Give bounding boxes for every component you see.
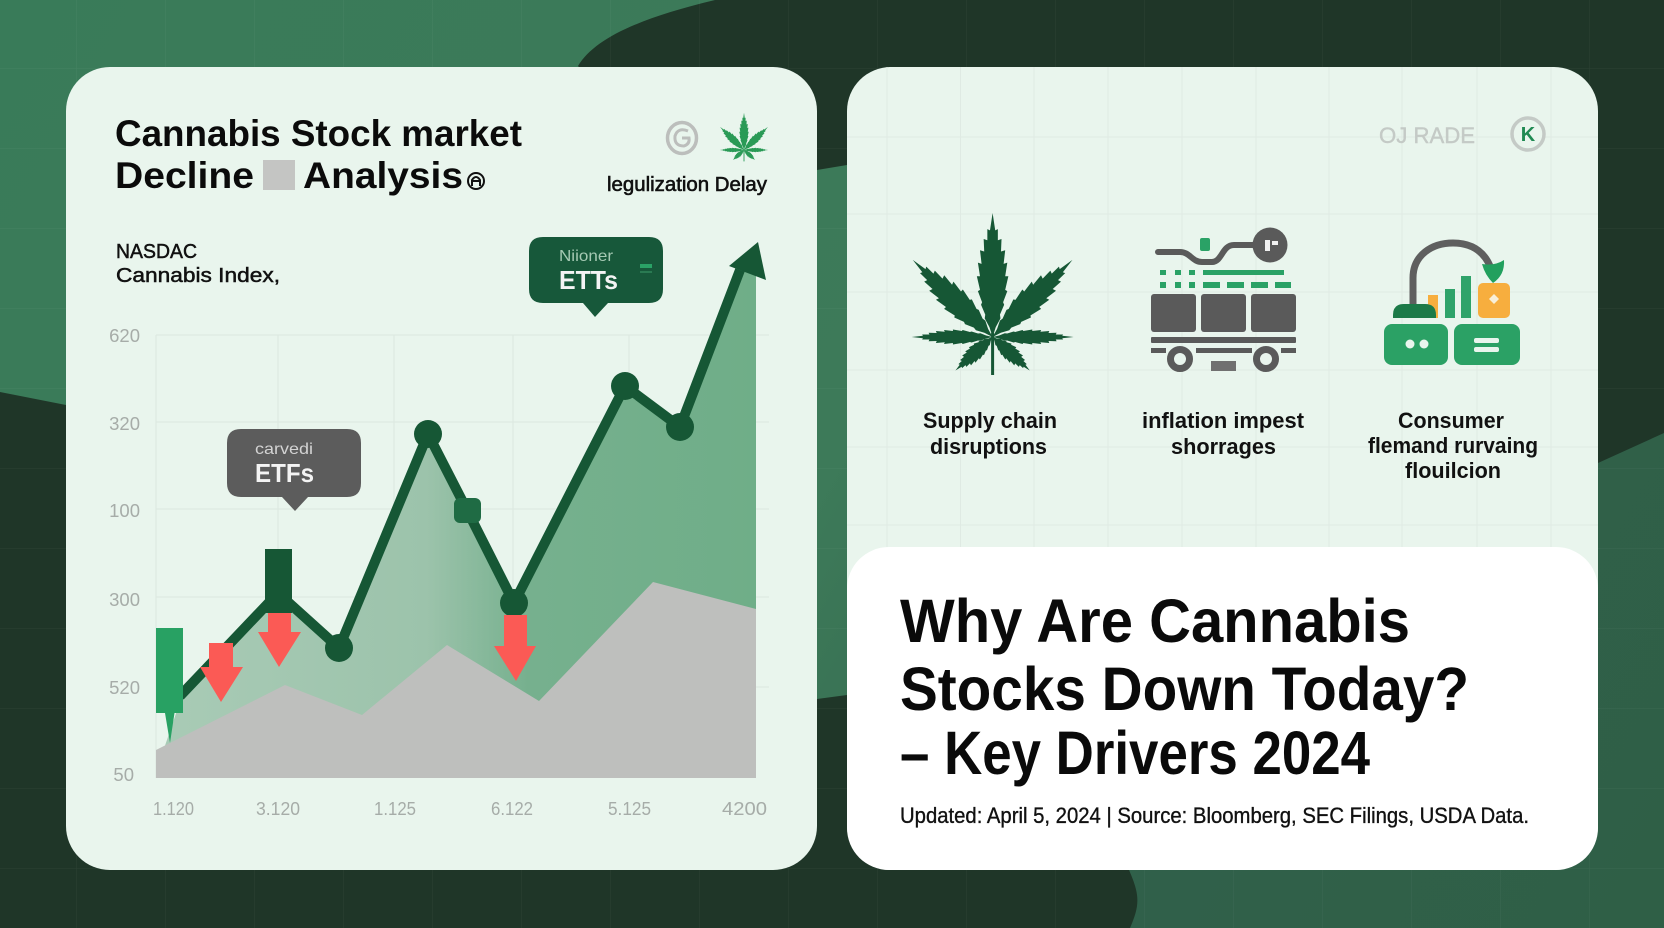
axis: x labels: 1.125 (374, 798, 416, 819)
markers (325, 372, 694, 662)
candle: dark green (265, 549, 292, 613)
heading: main title: – Key Drivers 2024 (900, 719, 1370, 787)
icon: grey circular badge (668, 122, 696, 154)
axis: y labels: 300 (109, 589, 140, 610)
label: consumer demand: Consumer (1398, 408, 1504, 433)
label: consumer demand (1368, 408, 1538, 483)
title: cannabis stock market decline analysis: Cannabis Stock market (115, 113, 522, 154)
label: inflation impest shorrages (1142, 408, 1305, 459)
arrow: red down 1 (200, 643, 243, 702)
callout: grey ETFs: ETFs (255, 458, 314, 488)
label: consumer demand: flemand rurvaing (1368, 433, 1538, 458)
title: cannabis stock market decline analysis: Analysis (303, 155, 463, 196)
callout: green ETTs (529, 237, 663, 317)
chart area: grey series (156, 582, 756, 778)
chart line with arrow (180, 242, 766, 696)
chart: cannabis index area and line chart (109, 242, 769, 819)
axis: y labels: 520 (109, 677, 140, 698)
axis: y labels: 620 (109, 325, 140, 346)
axis: x labels: 4200 (722, 798, 767, 819)
label: supply chain disruptions: Supply chain (923, 408, 1057, 433)
callout: grey ETFs (227, 429, 361, 511)
icon: K badge: K (1521, 124, 1536, 146)
callout: green ETTs: Niioner (559, 248, 614, 265)
icon: small green leaf (717, 113, 771, 162)
axis: y labels: 320 (109, 413, 140, 434)
axis: y labels: 100 (109, 500, 140, 521)
label: legalization delay: legulization Delay (607, 174, 767, 196)
panel: headline card (847, 547, 1598, 870)
callout: grey ETFs: carvedi (255, 441, 313, 458)
axis: x labels: 1.120 (153, 798, 194, 819)
arrow: red down 2 (258, 613, 301, 667)
axis: y labels (109, 325, 140, 785)
label: inflation impest shorrages: inflation impest (1142, 408, 1305, 433)
icon: delivery truck (1151, 228, 1296, 371)
title: cannabis stock market decline analysis (115, 113, 522, 196)
label: inflation impest shorrages: shorrages (1171, 434, 1276, 459)
title: cannabis stock market decline analysis: Decline (115, 155, 254, 196)
axis: x labels (153, 798, 767, 819)
icon: info badge (468, 173, 484, 189)
callout: green ETTs: ETTs (559, 265, 618, 295)
label: index name (116, 241, 280, 287)
heading: main title: Stocks Down Today? (900, 655, 1469, 723)
chart area: green series (156, 265, 756, 778)
icon: large cannabis leaf (903, 213, 1082, 377)
arrow: red down 3 (494, 615, 536, 681)
axis: x labels: 3.120 (256, 798, 300, 819)
panel: drivers card (847, 67, 1598, 870)
source line: Updated: April 5, 2024 | Source: Bloomberg, SEC Filings, USDA Data. (900, 803, 1529, 828)
axis: x labels: 6.122 (491, 798, 533, 819)
axis: x labels: 5.125 (608, 798, 651, 819)
label: supply chain disruptions: disruptions (930, 434, 1047, 459)
icon: K badge (1512, 118, 1544, 150)
label: index name: Cannabis Index, (116, 265, 280, 287)
icon: consumer demand boxes (1384, 243, 1520, 365)
candle: green (156, 628, 183, 743)
faint brand text: OJ RADE (1379, 123, 1475, 148)
axis: y labels: 50 (113, 764, 134, 785)
label: supply chain disruptions (923, 408, 1057, 459)
heading: main title (900, 587, 1469, 787)
heading: main title: Why Are Cannabis (900, 587, 1410, 655)
label: consumer demand: flouilcion (1405, 458, 1501, 483)
panel: stock chart card (66, 67, 817, 870)
label: index name: NASDAC (116, 241, 197, 263)
